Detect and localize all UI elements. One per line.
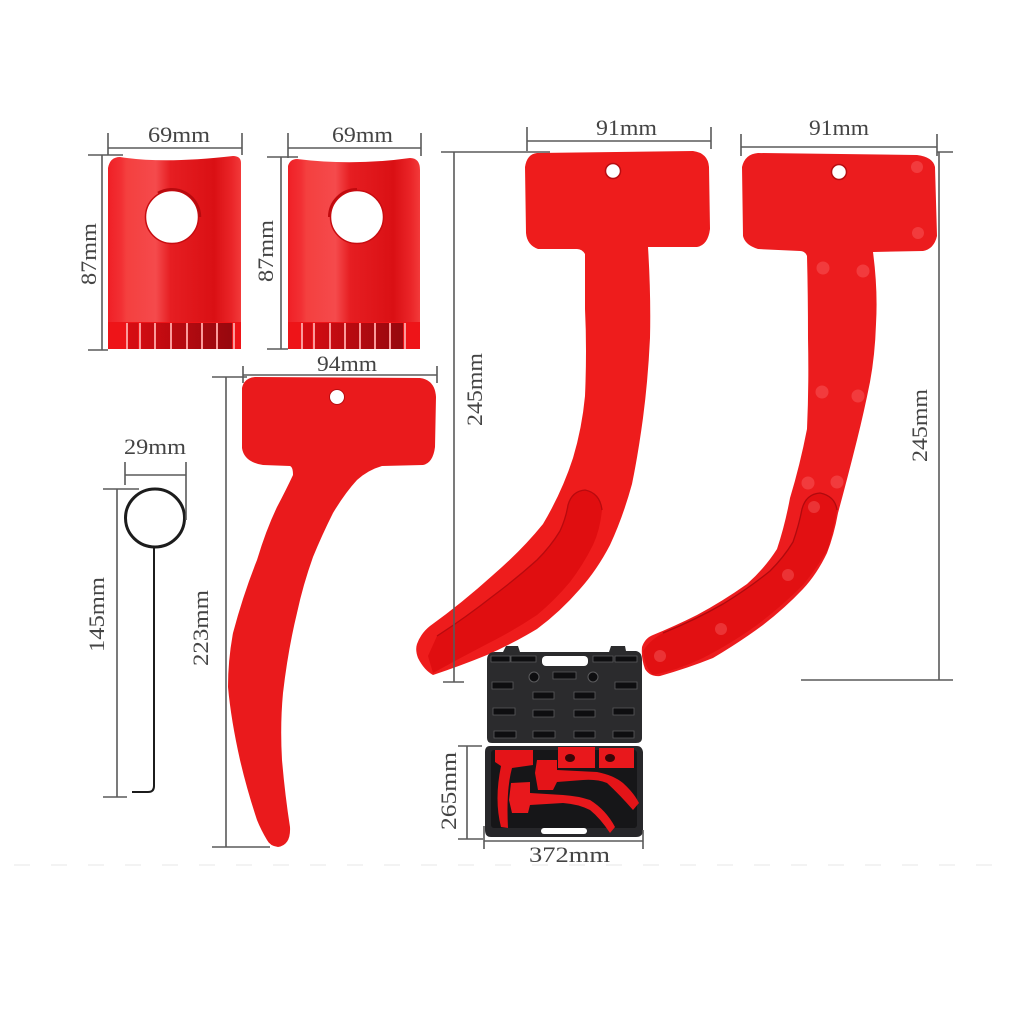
dimension 87mm right: 87mm	[253, 220, 278, 282]
dimension 145mm	[84, 489, 139, 797]
dimension 69mm left: 69mm	[148, 122, 210, 147]
dimension 91mm middle: 91mm	[596, 115, 657, 140]
dimension 91mm right	[741, 115, 937, 156]
dimension 245mm right	[801, 152, 953, 680]
dimension 223mm: 223mm	[188, 590, 213, 666]
case piece: block 2	[599, 748, 634, 768]
dimension 372mm	[484, 826, 643, 867]
curved lever 223mm	[228, 377, 436, 847]
faint dashed baseline	[14, 864, 1010, 866]
dimension 372mm: 372mm	[529, 842, 610, 867]
dimension 29mm: 29mm	[124, 434, 186, 459]
dimension 91mm middle	[527, 115, 711, 151]
dimension 69mm right: 69mm	[332, 122, 393, 147]
dimension 94mm	[243, 351, 437, 383]
dimension 223mm	[188, 377, 270, 847]
dimension 87mm left: 87mm	[76, 223, 101, 285]
dimension 94mm: 94mm	[317, 351, 377, 376]
dimension 245mm middle	[441, 152, 550, 682]
case piece: long lever 1	[535, 760, 639, 810]
curved lever 245mm middle	[416, 151, 710, 675]
dimension 245mm right: 245mm	[907, 389, 932, 462]
dimension 265mm	[436, 746, 483, 839]
case piece: short lever	[495, 750, 533, 828]
dimension 145mm: 145mm	[84, 577, 109, 652]
block piece left	[108, 156, 241, 349]
case piece: block 1	[558, 747, 595, 768]
dimension 245mm middle: 245mm	[462, 353, 487, 426]
block piece right	[288, 158, 420, 349]
dimension 87mm left	[76, 155, 123, 350]
dimension 69mm left	[108, 122, 242, 155]
case piece: long lever 2	[509, 782, 615, 833]
dimension 87mm right	[253, 157, 298, 349]
dimension 69mm right	[288, 122, 421, 158]
dimension 265mm: 265mm	[436, 752, 461, 830]
carrying case	[485, 646, 643, 837]
dimension 29mm	[124, 434, 186, 520]
curved lever 245mm right	[642, 153, 937, 676]
dimension 91mm right: 91mm	[809, 115, 869, 140]
wire hook	[126, 489, 184, 792]
